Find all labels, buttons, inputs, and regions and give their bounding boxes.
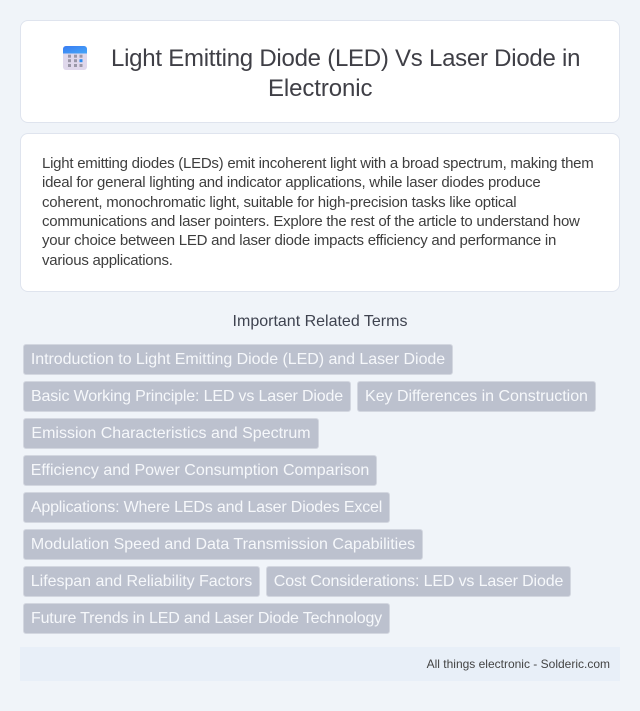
tag [23,455,377,486]
tag: Basic Working Principle: LED vs Laser Diode [31,388,343,405]
tag [23,566,260,597]
description text: communications and laser pointers. Explore the rest of the article to understand how [42,213,580,230]
panel: description [20,133,620,292]
tag [23,529,423,560]
tag [23,418,319,449]
tag: Emission Characteristics and Spectrum [31,425,311,442]
tag [23,344,453,375]
tag: Introduction to Light Emitting Diode (LED) and Laser Diode [31,351,445,368]
tag [23,492,390,523]
tag [266,566,571,597]
panel: title card [20,20,620,123]
footer: All things electronic - Solderic.com [427,657,610,671]
title [111,45,580,102]
tag [23,381,351,412]
tag [357,381,596,412]
tag: Efficiency and Power Consumption Comparison [31,462,369,479]
description text: your choice between LED and laser diode impacts efficiency and performance in [42,232,556,249]
tag [23,603,390,634]
title: Light Emitting Diode (LED) Vs Laser Diode in [111,45,580,72]
tag: Applications: Where LEDs and Laser Diodes Excel [31,499,382,516]
tag: Future Trends in LED and Laser Diode Technology [31,610,382,627]
related terms tags [23,344,596,634]
description text: ideal for general lighting and indicator applications, while laser diodes produce [42,174,540,191]
description text: various applications. [42,252,173,269]
tag: Key Differences in Construction [365,388,588,405]
title: Electronic [268,75,372,102]
icon: calendar grid [63,46,87,70]
heading: related terms: Important Related Terms [233,313,407,330]
description text: Light emitting diodes (LEDs) emit incoherent light with a broad spectrum, making them [42,155,594,172]
description text: coherent, monochromatic light, suitable for high-precision tasks like optical [42,194,516,211]
tag: Lifespan and Reliability Factors [31,573,252,590]
description text [42,155,594,269]
tag: Cost Considerations: LED vs Laser Diode [274,573,563,590]
footer [20,647,620,681]
tag: Modulation Speed and Data Transmission Capabilities [31,536,415,553]
